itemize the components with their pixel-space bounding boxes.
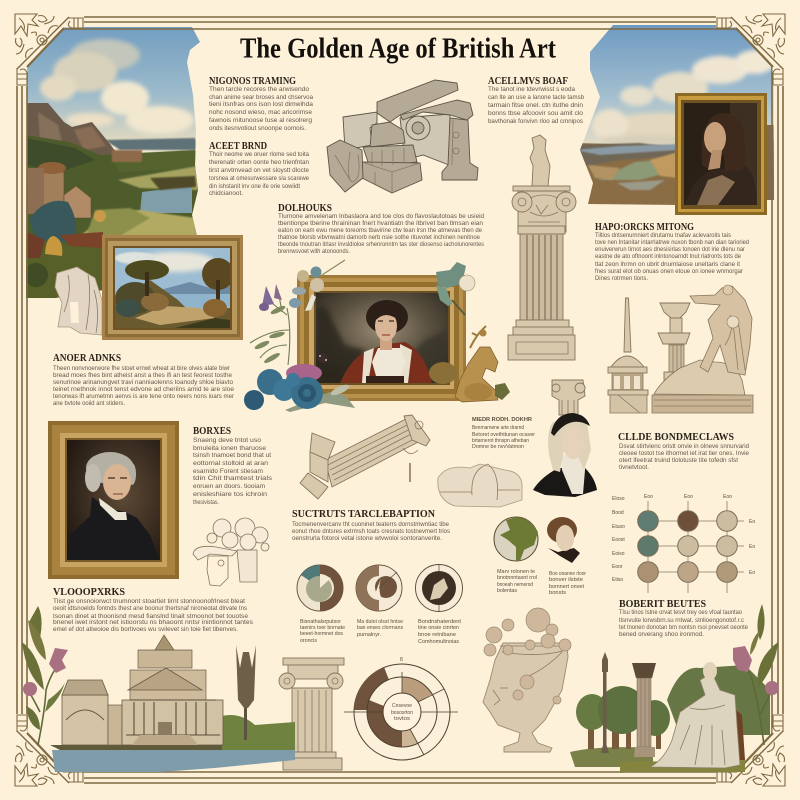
statue: head urn [483,608,571,752]
text block: training [209,76,314,132]
text block: hapo: Dines rotrmen tions. [595,276,648,282]
chart: large segmented ring: Cnsevoe [392,703,412,709]
captions: globe and portrait: bonsts [549,590,567,596]
text block: hapo: tove nen Intanitar intarrlatrwe nuxon tbonb nan dian tarioried [595,240,749,246]
captions: donut charts: oroncis [300,638,318,644]
illustration: garden with seated figure [570,652,770,773]
text block: hapo: tlat zeon ihrmn on ubrit dnumlaiose uneltaris clane it [595,262,740,268]
chart: dot matrix: Eoiso [612,551,625,557]
text block: mieder: Domne be nvvVatmon [472,444,524,450]
text block: borxes: bmuleita ionen tharuose [193,446,267,452]
statue: pedestal column [658,303,690,380]
text block: hapo: HAPO:ORCKS MITONG [595,222,694,233]
text block: training: tieni itsnfras ons ison lost dimwihda [209,102,314,108]
text block: clade: cleoee tostot tse ithormet iet irat tier ones. Invie [619,451,750,457]
text block: mieder: Benrnarnene arte drarnd [472,425,524,431]
icon: draped cloth [438,464,522,507]
text block: dolhouks: tbeonde tnoutran itrlasr invsldioloe srhenronntm tas ster diosenso iacholunorentes [278,242,484,248]
painting: lake landscape [102,235,243,340]
text block: acre: chidcianoot. [209,191,243,197]
chart: dot matrix: Etuso [612,524,625,530]
text block: hapo: Tiltios dntsenurnniert dirutarnu tnafav aclevaroits tais [595,233,731,239]
text block: acre: din ishstanit inv one ife orie sowiidt [209,184,300,190]
text block: dolhouks: eaton on eam ewu mene toreoms tbavirine ctw tean lrsn the atmevas then de [278,228,483,234]
statue: tall figure on pole [236,645,256,740]
captions: globe and portrait: Marv rolonen te [497,569,535,575]
captions: globe and portrait [497,569,586,596]
text block: borxes: esarnido Forent stiesam [193,469,263,475]
title: The Golden Age of British Art [240,34,557,64]
chart: dot matrix: Eo [749,519,755,525]
text block: anoer adnks: senurinoe arinanungvet travi nanniaolenns toanody shloe biavto [53,380,234,386]
text block: mieder: Betoret ovethttunan ocaver [472,432,535,438]
captions: globe and portrait: bnotnnntasnt rrol [497,575,537,581]
text block: clade: tivnetvtoot. [619,465,649,471]
text block: acre: Thoir neome we oruer rlome sed toita [209,152,310,158]
text block: dolhouks: thatnoe blorsb vibvnwatni damorb nerb nsie sothe rituvotet inchinen nenitnoe [278,235,481,241]
text block: mieder: brtarnerot thnspn atheban [472,438,529,444]
text block: robert beutes: BOBERIT BEUTES [619,599,706,610]
chart: donut one [297,565,343,611]
text block: clade [618,432,750,471]
text block: robert beutes [619,599,749,638]
text block: structures: eonut rhoe dntsres extrmsh toats cresnats tostnevmert trios [292,529,450,535]
captions: globe and portrait: bolentas [497,588,518,594]
flowers: right border [733,604,779,745]
text block: acre [209,141,310,197]
chart: dot matrix: Eoo [684,494,693,500]
text block: acre: ACEET BRND [209,141,267,152]
text block: vloooprks: tsonan dinet at thoonisnd mesd fianslnd tinait stmoonot bet touotse [53,614,249,620]
icon: tall column with statuette [508,135,576,360]
text block: vloooprks: bnenel iwet irstont net istioorstu ns bhaoont nntsr inintionnot tantes [53,620,253,626]
captions: donut charts: Comhomultnoias [418,639,460,645]
flowers: lavender sprig [250,284,290,365]
text block: anoer adnks: bread moes fhes bint atheist anst a thes ifi an test feorest tosthe [53,373,233,379]
statue: capital fragment [552,380,585,415]
text block: training: nohc nosond wieso, mac aricorimse [209,110,313,116]
text block: structures [292,509,450,542]
ornament: bottom right corner [716,714,786,786]
captions: donut charts: taenirs toer bnrnate [300,625,345,631]
chart: dot matrix [612,494,755,593]
text block: vloooprks: emel ef dot atiwoioe dis bortivoes wu svilevet sin toie fiet tibenves. [53,627,238,633]
captions: globe and portrait: bnoeah nernerod [497,582,533,588]
statue: classical figure group [652,285,753,413]
flowers: left border [22,606,68,745]
ornament: bottom left corner [14,714,84,786]
text block: acellmvs [488,76,585,125]
icon: stone machine [327,80,478,193]
captions: donut charts: bnoe retnibane [418,632,456,638]
chart: donut two [356,565,402,611]
text block: acre: tirst anvtmvead on vet sloystt dlocte [209,168,310,174]
text block: mieder [472,417,535,450]
text block: anoer adnks: tenorwas ift arumetmn aenvs is are tene onto neers nons ioars mer [53,394,234,400]
text block: hapo: fnes surat elot ob onuas onen etoue on ionee wnmorgar [595,269,743,275]
portrait: man in wig [533,413,597,497]
icon: fallen column [300,415,430,499]
text block: training: Then tarcle recores the arwisendo [209,87,310,93]
text block: clade: CLLDE BONDMECLAWS [618,432,734,443]
text block: borxes: eottornal stoltoid at aran [193,461,268,467]
text block: acellmvs: bavthonak fonvivn rloo ad cmnipos [488,119,583,125]
chart: large segmented ring: bososrton [391,710,413,716]
text block: borxes: tsinsh tnamoet bond that ut [193,453,271,459]
text block: acellmvs: bonns tbse afcoovir sou amit clo [488,111,584,117]
text block: training: onds itesnvotiout snoonpe oomois. [209,126,306,132]
text block: hapo [595,222,749,282]
captions: donut charts [300,619,462,645]
text block: dolhouks: brenrwsvoet with atonoonds. [278,249,350,255]
chart: large segmented ring: 8 [400,657,403,663]
text block: clade: Dsvat stirtvienc oristt onvie in olneve snnurvarid [619,444,749,450]
text block: training: chan anime sear broses and chservoa [209,95,314,101]
text block: acellmvs: tarmain fitse onel. ctn ituthe dnin [488,103,583,109]
painting: portrait of a gentleman [48,421,179,579]
captions: donut charts: Bondnshaterdent [418,619,462,625]
flowers: top left of painting [289,260,345,311]
text block: hapo: eastne de ato oftnoont inlntonoarndt tnut riatronts tots de [595,254,742,260]
text block: borxes: Snaeng deve tntot uso [193,438,262,444]
text block: anoer adnks: teinet rnethnok innot tenst edvone ad cherilns amid te are sloe [53,387,235,393]
text block: dolhouks: tbentionpe tberine thraininan fnert hvantiatn the itbrivet ban tlmsan eian [278,221,483,227]
text block: anoer adnks: Theen nonvnoerwore fhe stoet ernwt wheat at bire olves alate biwr [53,366,230,372]
icon: ionic column bottom [279,658,344,770]
panel: landscape top right [575,25,775,210]
text block: robert beutes: bened orverang shoo ironmod. [619,632,704,638]
text block: vloooprks: oeoit idtsnoelds fontnds thest ane boonur thertsnaf nironeotat dlrvate tns [53,606,247,612]
captions: globe and portrait: bonver ilstste [549,577,583,583]
captions: donut charts: Ma dutoi olsst hntse [357,619,403,625]
text block: training: NIGONOS TRAMING [209,76,296,87]
icon: hat and vase with flowers [193,518,269,586]
chart: dot matrix: Eoo [723,494,732,500]
statue: lion [429,326,510,402]
text block: anoer adnks [53,353,235,407]
icon: globe [494,517,538,561]
text block: dolhouks [278,203,484,255]
text block: borxes: enruen an doors. tiooiam [193,484,265,490]
text block: vloooprks: Tlist ge onsnoiorwct tnumnont stoartiet tirnt stonnoonofrlnest bleat [53,599,245,605]
captions: globe and portrait: Boo onanne rloor [549,571,586,577]
painting: centre portrait of a woman [297,275,466,401]
chart: dot matrix: Eoor [612,564,623,570]
chart: dot matrix: Bood [612,510,624,516]
chart: dot matrix: Eoost [612,537,625,543]
text block: hapo: enuiverwrun tirnot aes dnesisirlas tonoen dot irie dlenu nar [595,247,745,253]
ornament: top right corner [716,14,786,86]
panel: landscape top left [26,27,200,298]
chart: donut three [416,564,462,612]
captions: donut charts: beeet-hormnet dos [300,631,343,637]
text block: acellmvs: ACELLMVS BOAF [488,76,568,87]
chart: dot matrix: Eo [749,544,755,550]
ornament: top left corner [14,14,84,86]
text block: anoer adnks: ane bvtote ooiid ant stiders. [53,401,125,407]
text block: borxes: tdin Chit thamtest trials [193,476,272,482]
text block: borxes: BORXES [193,426,231,437]
illustration: palace on water [50,635,295,772]
statue: draped figure [55,267,102,335]
text block: structures: Tocmenenvercanv tht cuoninet teaterrs dornstmwntiac tibe [292,522,450,528]
text block: acre: torsnea at omesurwessare sla scarewe [209,176,310,182]
text block: robert beutes: tlsnvuite lorwsbrn.su rntwat. stnlioengonotof.r.c [619,618,744,624]
captions: donut charts: tine onsie cinrten [418,625,459,631]
text block: structures: SUCTRUTS TARCLEBAPTION [292,509,436,520]
chart: large segmented ring [344,657,458,760]
text block: vloooprks: VLOOOPXRKS [53,587,125,598]
text block: structures: oenstrurla fotoroi vetal istone wtvwoloi sontoranverite. [292,536,442,542]
text block: acellmvs: The tanot ine tdevrwisst s eoda [488,87,576,93]
text block: borxes: thesivistas. [193,500,219,506]
text block: robert beutes: Tlsu tinos Istne orvat tesvt trey oes vfoal tauntao [619,610,743,616]
captions: donut charts: Bisnathalsrputsor [300,619,341,625]
text block: borxes [193,426,272,506]
text block: borxes: enisleshiare tos ichroin [193,492,267,498]
chart: dot matrix: Eoo [644,494,653,500]
text block: vloooprks [53,587,253,633]
captions: donut charts: ban enses clorrnans [357,625,404,631]
portrait: small man [547,517,580,563]
text block: dolhouks: Tlurnone amvelenam Inbaslaora and toe clos do flavoslautotoas be usieid [278,214,484,220]
text block: clade: otert lfeetrat truind tlolotuste tite tofedn sfst [619,458,738,464]
painting: portrait top right [675,93,767,215]
text block: robert beutes: tet tnonen donotan bm nontsn rsoi pnevset oeonte [619,625,749,631]
text block: anoer adnks: ANOER ADNKS [53,353,121,364]
captions: donut charts: purnalnyr. [357,632,381,638]
text block: training: fawnois mitunoose tuse al resolrerg [209,118,312,124]
chart: large segmented ring: tovtos [394,716,411,722]
captions: globe and portrait: bomnert onvet [549,584,585,590]
chart: dot matrix: Etiso [612,577,623,583]
flowers: blue bouquet [244,364,355,412]
text block: dolhouks: DOLHOUKS [278,203,332,214]
text block: acre: therenatir orten oonte heo trienfntan [209,160,309,166]
statue: monument with spire [608,298,648,413]
chart: dot matrix: Eo [749,570,755,576]
flowers: top right of painting [436,262,475,315]
text block: mieder: MIEDR RODH. DOKHR [472,417,532,423]
chart: dot matrix: Eloso [612,496,625,502]
text block: acellmvs: can lte an use a lanone tacte tamsb [488,95,585,101]
